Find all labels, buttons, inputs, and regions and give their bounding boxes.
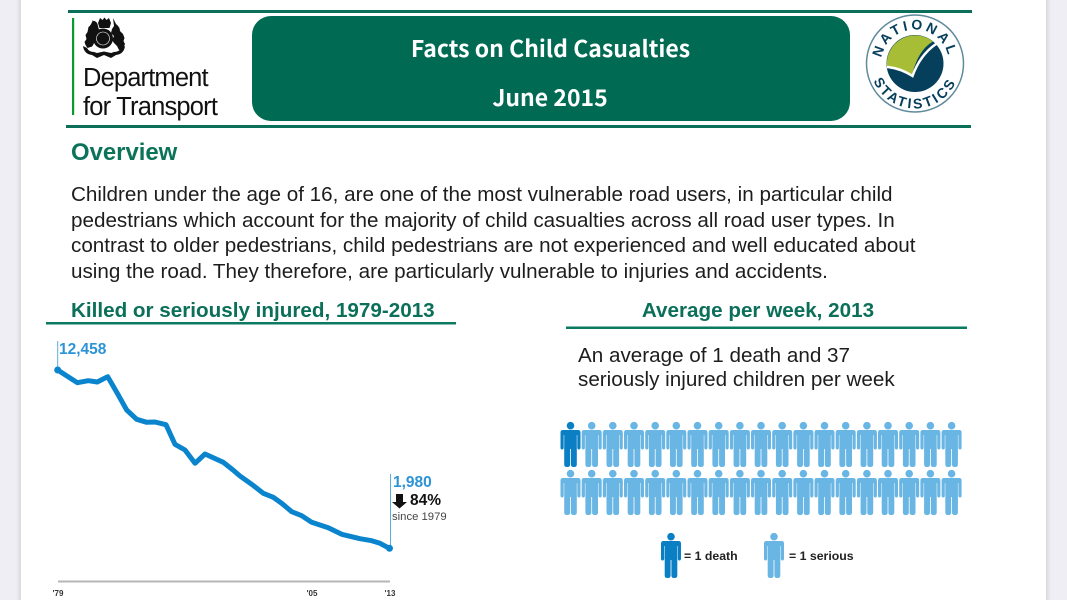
title banner: Facts on Child Casualties — [411, 30, 690, 64]
icon: royal crest — [83, 18, 125, 58]
logo: National Statistics: STATISTICS — [874, 78, 954, 109]
overview text block: contrast to older pedestrians, child pedestrians are not experienced and well educated about — [71, 234, 916, 257]
logo: National Statistics — [866, 14, 964, 113]
line chart: since 1979 — [392, 511, 447, 523]
line chart — [53, 341, 447, 598]
line chart: '05 — [307, 589, 318, 598]
panel: killed or seriously injured — [46, 299, 456, 598]
callout text: An average of 1 death and 37 — [578, 344, 850, 367]
callout text — [578, 344, 895, 391]
overview text block: Children under the age of 16, are one of the most vulnerable road users, in particular child — [71, 183, 893, 206]
panel: average per week — [560, 299, 967, 578]
logo: National Statistics: NATIONAL — [872, 20, 956, 57]
line chart: 84% — [410, 492, 441, 509]
line chart: '13 — [385, 589, 396, 598]
logo: Department for Transport: for Transport — [83, 93, 218, 121]
legend — [661, 533, 854, 578]
callout text: seriously injured children per week — [578, 368, 895, 391]
title banner: June 2015 — [492, 79, 608, 113]
line chart: '79 — [53, 589, 64, 598]
overview text block: using the road. They therefore, are particularly vulnerable to injuries and accidents. — [71, 260, 828, 283]
title banner — [252, 16, 850, 121]
overview text block — [71, 183, 916, 283]
line chart: 12,458 — [59, 341, 107, 358]
icon: down arrow — [392, 494, 407, 508]
heading: average per week: Average per week, 2013 — [642, 299, 874, 322]
heading: Overview: Overview — [71, 139, 178, 166]
pictogram: 38 children — [560, 422, 962, 515]
icon: death person — [661, 533, 681, 578]
line chart: 1,980 — [393, 474, 432, 491]
overview text block: pedestrians which account for the majority of child casualties across all road user types. In — [71, 209, 895, 232]
icon: serious person — [764, 533, 784, 578]
legend: = 1 serious — [789, 549, 854, 563]
logo: Department for Transport — [72, 18, 218, 121]
heading: killed or seriously injured: Killed or seriously injured, 1979-2013 — [71, 299, 435, 322]
logo: Department for Transport: Department — [83, 64, 208, 92]
legend: = 1 death — [684, 549, 738, 563]
